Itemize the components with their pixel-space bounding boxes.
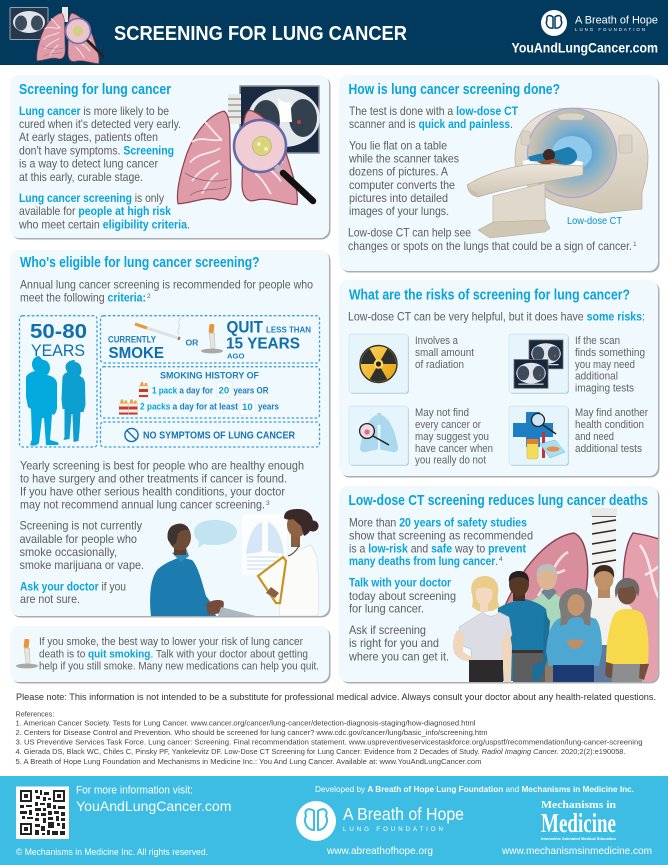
text block: intro: Lung cancer is more likely to be: [19, 105, 169, 118]
text block: talk with your doctor: Talk with your doctor: [349, 577, 451, 590]
text block: not available: smoke marijuana or vape.: [20, 559, 144, 572]
text block: recommendation: 2: [147, 293, 151, 300]
risk: more imaging: [509, 334, 645, 395]
criteria box: no symptoms: NO SYMPTOMS OF LUNG CANCER: [143, 430, 296, 441]
criteria box: smoking history: 20: [218, 385, 229, 396]
text block: how: pictures into detailed: [349, 192, 448, 205]
text block: not available: [20, 520, 144, 606]
criteria box: smoking status: [100, 316, 320, 363]
criteria box: smoking history: years: [258, 401, 279, 412]
speech bubble: [194, 520, 237, 548]
text: more information: For more information visit:: [76, 784, 193, 796]
text block: intro: at this early, curable stage.: [19, 171, 143, 184]
risk: more imaging: If the scan: [575, 335, 620, 347]
logo: A Breath of Hope footer: LUNG FOUNDATION: [343, 826, 443, 833]
logo: A Breath of Hope footer: [296, 801, 464, 841]
text block: intro: At early stages, patients often: [19, 131, 158, 144]
risk: radiation: small amount: [415, 347, 474, 359]
text block: safety studies: many deaths from lung cancer.: [349, 555, 498, 568]
text block: risks intro: Low-dose CT can be very helpful, but it does have some risks:: [348, 311, 645, 324]
icon: radiation symbol: [360, 346, 397, 382]
logo: A Breath of Hope header: A Breath of Hope: [575, 14, 658, 26]
illustration: large lungs behind people: [505, 508, 668, 686]
text block: yearly screening: 3: [266, 500, 270, 507]
logo: A Breath of Hope header: LUNG FOUNDATION: [575, 27, 645, 32]
text block: how: dozens of pictures. A: [349, 166, 448, 179]
panel: quit smoking tip: [10, 626, 330, 684]
text block: how: computer converts the: [349, 179, 455, 192]
risk: other conditions: May find another: [575, 407, 648, 419]
icon: two packs: [119, 400, 138, 414]
panel: screening for lung cancer: [10, 75, 330, 240]
icon: medical cross, magnifier and samples: [513, 412, 565, 459]
criteria box: smoking status: 15 YEARS: [226, 336, 300, 353]
text block: how: Low-dose CT can help see: [348, 227, 471, 240]
risk: more imaging: finds something: [575, 347, 645, 359]
label: Low-dose CT: [567, 216, 622, 227]
text block: safety studies: show that screening as recommended: [349, 529, 533, 542]
text block: intro: Lung cancer screening is only: [19, 192, 164, 205]
logo: A Breath of Hope footer: A Breath of Hope: [343, 804, 464, 824]
logo: Mechanisms in Medicine: Interactive Animated Medical Education: [541, 837, 617, 841]
text block: safety studies: More than 20 years of safety studies: [349, 517, 527, 530]
risk: false results: May not find: [415, 407, 469, 419]
text block: recommendation: meet the following criteria:: [20, 292, 146, 305]
text block: safety studies: 4: [499, 556, 503, 563]
older woman in yellow: [605, 578, 649, 682]
blond woman: [453, 576, 512, 682]
references: [16, 710, 642, 766]
text block: quit smoking: If you smoke, the best way to lower your risk of lung cancer: [39, 636, 303, 648]
criteria box: smoking history: years OR: [234, 384, 269, 395]
text block: how: 1: [633, 241, 637, 248]
table: [467, 164, 583, 197]
illustration: low-dose CT scanner: [467, 108, 648, 238]
logo: Mechanisms in Medicine: Mechanisms in: [541, 800, 616, 811]
older man: [532, 564, 561, 682]
text block: quit smoking: help if you still smoke. Many new medications can help you quit.: [39, 660, 319, 672]
icon: cigarette: [135, 318, 180, 339]
risk: radiation: [349, 334, 474, 394]
text block: quit smoking: [39, 636, 319, 672]
logo: Mechanisms in Medicine: Medicine: [541, 808, 616, 838]
text block: talk with your doctor: is right for you and: [349, 637, 439, 650]
patient: [150, 524, 256, 616]
criteria box: smoking status: SMOKE: [108, 345, 164, 362]
text block: safety studies: is a low-risk and safe way to prevent: [349, 542, 526, 555]
references: 3. US Preventive Services Task Force. Lung cancer: Screening. Final recommendation statement. www.uspreventiveservicestaskforce.org/uspstf/recommendation/lung-cancer-screening: [16, 738, 642, 746]
icon: header lungs with CT scan and magnifier: [10, 7, 104, 64]
heading: Screening for lung cancer: [19, 82, 171, 98]
text: more information: [76, 784, 232, 814]
text block: intro: who meet certain eligibility criteria.: [18, 218, 190, 232]
logo: Mechanisms in Medicine: [541, 800, 617, 841]
medical disclaimer: Please note: This information is not intended to be a substitute for professional medical advice. Always consult your doctor about any health-related questions.: [16, 692, 656, 703]
icon: one pack: [139, 382, 148, 397]
text block: talk with your doctor: where you can get it.: [348, 650, 449, 663]
logo: A Breath of Hope header: [541, 10, 658, 36]
text block: how: The test is done with a low-dose CT: [349, 105, 519, 118]
text block: talk with your doctor: [348, 577, 456, 663]
icon: man silhouette: [26, 356, 59, 446]
text block: intro: cured when it's detected very early.: [19, 118, 181, 131]
title: SCREENING FOR LUNG CANCER: [114, 23, 408, 45]
link: mechanismsinmedicine: www.mechanismsinmedicine.com: [501, 846, 652, 857]
text block: quit smoking: death is to quit smoking. Talk with your doctor about getting: [39, 648, 308, 660]
text block: how: [348, 105, 637, 253]
text block: intro: is a way to detect lung cancer: [19, 158, 158, 170]
panel: who's eligible: [10, 250, 330, 618]
criteria box: smoking status: OR: [186, 338, 199, 348]
risk: false results: you really do not: [415, 454, 486, 466]
text block: recommendation: Annual lung cancer screening is recommended for people who: [20, 279, 313, 292]
icon: CT images: [514, 340, 563, 388]
text block: yearly screening: Yearly screening is best for people who are healthy enough: [20, 459, 304, 472]
references: 1. American Cancer Society. Tests for Lung Cancer. www.cancer.org/cancer/lung-cancer/detection-diagnosis-staging/how-diagnosed.html: [16, 718, 476, 728]
text block: talk with your doctor: today about screening: [349, 590, 456, 603]
criteria box: smoking history: 10: [242, 402, 253, 413]
text block: not available: Screening is not currently: [20, 520, 142, 533]
risk: other conditions: additional tests: [575, 443, 643, 455]
criteria box: age 50-80: [20, 316, 97, 447]
icon: extinguished cigarette: [16, 639, 38, 668]
illustration: group of six people: [453, 564, 649, 682]
text block: intro: don't have symptoms. Screening: [19, 144, 174, 158]
header band: [0, 0, 668, 65]
criteria box: smoking status: AGO: [227, 352, 245, 361]
text block: intro: [18, 105, 190, 232]
text block: safety studies: [349, 517, 533, 568]
text block: yearly screening: may not recommend annual lung cancer screening.: [20, 498, 265, 511]
criteria box: smoking history: 1 pack a day for: [152, 384, 213, 395]
risk: more imaging: you may need: [575, 359, 635, 371]
text block: intro: available for people at high risk: [19, 205, 171, 218]
text block: how: while the scanner takes: [348, 153, 459, 166]
risk: other conditions: and need: [575, 431, 614, 443]
text block: yearly screening: [20, 459, 304, 511]
risk: false results: every cancer or: [415, 419, 481, 431]
text block: recommendation: [20, 279, 313, 305]
text block: not available: Ask your doctor if you: [20, 580, 126, 593]
risk: other conditions: [509, 406, 648, 466]
criteria box: smoking history: SMOKING HISTORY OF: [160, 371, 259, 382]
chart on wall: [242, 514, 287, 575]
text block: how: images of your lungs.: [349, 205, 449, 218]
credits: Developed by A Breath of Hope Lung Foundation and Mechanisms in Medicine Inc.: [315, 784, 634, 794]
text block: not available: available for people who: [20, 533, 137, 546]
text block: talk with your doctor: Ask if screening: [349, 624, 426, 637]
criteria box: smoking history: 2 packs a day for at least: [140, 401, 238, 412]
text block: yearly screening: to have surgery and other treatments if cancer is found.: [20, 472, 287, 485]
text block: not available: smoke occasionally,: [20, 546, 117, 559]
heading: How is lung cancer screening done?: [348, 82, 560, 98]
man in blue: [498, 571, 550, 682]
panel: risks of screening: [339, 280, 660, 478]
illustration: patient talking with doctor: [150, 509, 319, 616]
risk: false results: may suggest you: [415, 431, 489, 443]
references: 5. A Breath of Hope Lung Foundation and Mechanisms in Medicine Inc.: You And Lung Cancer. Available at: www.YouAndLungCancer.com: [16, 757, 482, 766]
risk: radiation: Involves a: [415, 335, 458, 347]
text block: how: changes or spots on the lungs that could be a sign of cancer.: [348, 240, 632, 253]
risk: other conditions: health condition: [575, 419, 644, 431]
criteria box: no symptoms: [100, 422, 320, 447]
young man: [588, 565, 632, 682]
text block: yearly screening: If you have other serious health conditions, your doctor: [20, 485, 285, 498]
risk: more imaging: additional: [575, 371, 618, 383]
text block: not available: are not sure.: [20, 593, 80, 606]
risk: radiation: of radiation: [415, 359, 464, 371]
text block: how: You lie flat on a table: [349, 140, 447, 153]
references: References:: [16, 710, 54, 718]
panel: reduces deaths: [339, 486, 668, 686]
icon: lungs with magnifier: [360, 413, 398, 452]
references: 4. Gierada DS, Black WC, Chiles C, Pinsky PF, Yankelevitz DF. Low-Dose CT Screening for Lung Cancer: Evidence from 2 Decades of Study. Radiol Imaging Cancer. 2020;2(2):e190058.: [16, 747, 626, 756]
criteria box: smoking status: CURRENTLY: [108, 334, 156, 344]
footer band: [0, 776, 668, 865]
criteria box: smoking status: LESS THAN: [266, 324, 311, 334]
risk: false results: have cancer when: [415, 443, 493, 455]
criteria box: smoking status: QUIT: [226, 318, 263, 337]
criteria box: smoking history: [100, 367, 320, 418]
risk: false results: [349, 406, 493, 466]
icon: extinguished cigarette: [201, 324, 223, 353]
panel: how is screening done: [339, 75, 660, 272]
text block: talk with your doctor: for lung cancer.: [349, 603, 424, 616]
risk: more imaging: imaging tests: [575, 383, 635, 395]
doctor: [258, 509, 319, 616]
link: abreathofhope: www.abreathofhope.org: [326, 846, 433, 857]
references: 2. Centers for Disease Control and Prevention. Who should be screened for lung cancer? www.cdc.gov/cancer/lung/basic_info/screening.htm: [16, 728, 488, 737]
woman in blue sweater: [546, 588, 602, 682]
criteria box: age 50-80: YEARS: [31, 342, 85, 360]
patient on table: [523, 147, 583, 169]
text block: how: scanner and is quick and painless.: [349, 118, 513, 131]
criteria box: age 50-80: 50-80: [30, 321, 87, 343]
text: more information: YouAndLungCancer.com: [76, 798, 232, 814]
illustration: lungs, CT slice and magnifying glass: [177, 86, 320, 205]
QR code: [16, 786, 69, 839]
copyright: © Mechanisms in Medicine Inc. All rights reserved.: [16, 847, 208, 857]
heading: Who's eligible for lung cancer screening?: [20, 255, 260, 271]
icon: woman silhouette: [62, 360, 86, 442]
